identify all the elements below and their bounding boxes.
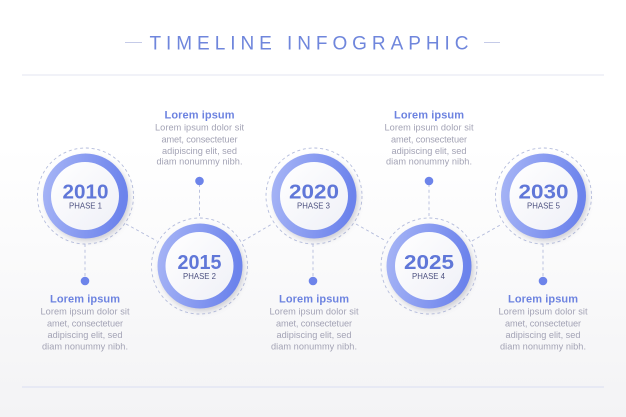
title: TIMELINE INFOGRAPHIC: [150, 34, 468, 54]
milestone 2025: 2025: [404, 252, 454, 274]
text block 4: Lorem ipsum: [394, 110, 464, 122]
milestone 2020: 2020: [289, 182, 339, 204]
text block 5: [498, 294, 588, 352]
milestone 2030: 2030: [518, 182, 568, 204]
milestone 2030: PHASE 5: [527, 202, 561, 210]
milestone 2010: 2010: [62, 182, 108, 204]
milestone 2010: [38, 148, 134, 244]
milestone 2015: [152, 218, 248, 314]
text block 2: Lorem ipsum: [164, 110, 235, 122]
text block 3: diam nonummy nibh.: [271, 342, 357, 352]
text block 1: [40, 294, 130, 352]
text block 4: amet, consectetuer: [391, 134, 467, 144]
text block 3: Lorem ipsum: [279, 294, 349, 306]
text block 1: amet, consectetuer: [47, 318, 123, 328]
text block 5: adipiscing elit, sed: [506, 330, 580, 340]
text block 4: diam nonummy nibh.: [386, 156, 472, 166]
text block 1: adipiscing elit, sed: [48, 330, 122, 340]
text block 3: amet, consectetuer: [276, 318, 352, 328]
text block 2: adipiscing elit, sed: [162, 146, 237, 156]
milestone 2030: [496, 148, 592, 244]
milestone 2020: [266, 148, 362, 244]
text block 3: adipiscing elit, sed: [276, 330, 352, 340]
text block 5: Lorem ipsum dolor sit: [498, 306, 588, 316]
text block 3: [270, 294, 359, 352]
milestone 2015: PHASE 2: [183, 272, 216, 281]
text block 5: diam nonummy nibh.: [500, 342, 586, 352]
text block 2: [155, 110, 244, 166]
text block 2: amet, consectetuer: [162, 134, 238, 144]
text block 4: Lorem ipsum dolor sit: [384, 122, 474, 132]
text block 4: [384, 110, 474, 166]
milestone 2020: PHASE 3: [297, 202, 330, 210]
dots: [81, 177, 547, 285]
text block 1: Lorem ipsum: [50, 294, 120, 306]
timeline connectors: [85, 184, 543, 278]
text block 5: amet, consectetuer: [505, 318, 581, 328]
text block 4: adipiscing elit, sed: [392, 146, 466, 156]
text block 2: Lorem ipsum dolor sit: [155, 122, 244, 132]
milestone 2010: PHASE 1: [69, 202, 102, 210]
milestone 2025: [381, 218, 477, 314]
text block 1: Lorem ipsum dolor sit: [40, 306, 130, 316]
text block 5: Lorem ipsum: [508, 294, 578, 306]
text block 1: diam nonummy nibh.: [42, 342, 128, 352]
milestone 2025: PHASE 4: [412, 272, 446, 281]
text block 2: diam nonummy nibh.: [156, 156, 242, 166]
milestone 2015: 2015: [178, 252, 222, 274]
text block 3: Lorem ipsum dolor sit: [270, 306, 359, 316]
